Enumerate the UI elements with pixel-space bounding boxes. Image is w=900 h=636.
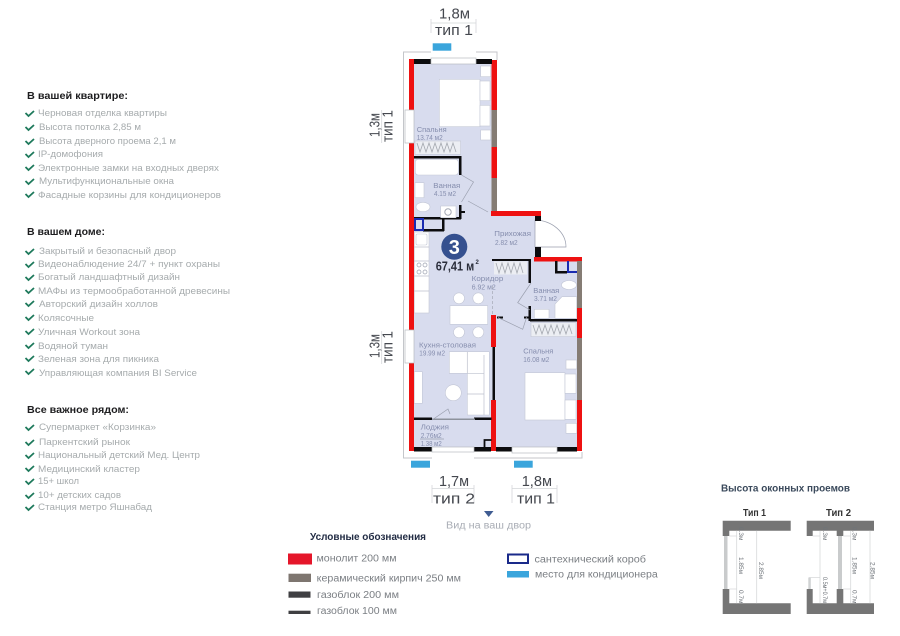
dimension: bottom window type 2 (432, 473, 475, 508)
room labels: Кухня-столовая (419, 340, 476, 350)
checklist: apartment features: IP-домофония (38, 149, 103, 160)
diagram: type 2: 1.85м (850, 557, 858, 575)
dimension: bottom window type 2: 1,7м (439, 473, 469, 490)
room labels: Ванная (533, 286, 559, 295)
apartment floor area (414, 64, 577, 447)
panel: nearby places list (26, 404, 200, 513)
diagram: type 1: 1.85м (737, 557, 744, 575)
diagram: type 1: 0.3м (737, 527, 744, 541)
legend: gas block 100: газоблок 100 мм (317, 605, 397, 617)
panel: legend (288, 531, 658, 617)
room labels: Спальня (523, 346, 553, 356)
legend heading: Условные обозначения (310, 531, 426, 543)
badge: three rooms: 3 (449, 237, 460, 259)
total area: 2 (476, 260, 480, 266)
legend: gas block 100 (288, 605, 397, 617)
furniture: dining table (450, 293, 488, 338)
diagram: type 1: Тип 1 (743, 507, 766, 519)
checklist: building features: Богатый ландшафтный дизайн (38, 272, 180, 283)
checklist: apartment features (26, 108, 221, 201)
diagram: type 1: 0.7м (737, 590, 744, 604)
checklist: nearby places: Медицинский кластер (38, 464, 140, 475)
diagram: type 1: 2.85м (757, 562, 764, 580)
windows (405, 58, 557, 453)
checklist: building features: Зеленая зона для пикника (38, 354, 160, 365)
checklist: apartment features: Фасадные корзины для кондиционеров (38, 190, 221, 201)
diagram: type 2: 0.7м (850, 590, 858, 604)
room labels: Ванная (433, 181, 460, 190)
checklist: apartment features: Электронные замки на входных дверях (38, 163, 219, 174)
legend: monolith: монолит 200 мм (316, 554, 397, 564)
checklist: building features (26, 246, 230, 379)
legend: plumbing shaft: сантехнический короб (534, 554, 646, 566)
furniture: bedroom 2 (492, 286, 577, 433)
checklist: building features: Уличная Workout зона (38, 327, 141, 338)
heading: everything nearby: Все важное рядом: (27, 404, 129, 416)
dimension: left lower window: 1,3м (366, 334, 384, 358)
dimension: bottom window type 1: 1,8м (522, 473, 552, 490)
checklist: building features: МАФы из термообработанной древесины (38, 286, 230, 297)
checklist: building features: Закрытый и безопасный двор (39, 246, 176, 257)
air conditioner spots (411, 43, 533, 468)
checklist: building features: Управляющая компания BI Service (39, 368, 197, 379)
diagram: type 2: 0.5м+0.7м (821, 577, 828, 603)
furniture: bathroom 1 fixtures (415, 159, 488, 218)
room labels: 3.71 м2 (534, 294, 557, 303)
total area: 67,41 м (436, 260, 474, 274)
entrance door (535, 220, 566, 247)
room labels: 4.15 м2 (434, 189, 456, 198)
diagram: type 2 (807, 507, 876, 614)
checklist: building features: Колясочные (38, 313, 94, 324)
room labels: Прихожая (494, 229, 531, 238)
room labels: Лоджия (421, 422, 449, 432)
checklist: building features: Авторский дизайн холлов (39, 299, 158, 310)
legend: air conditioner place: место для кондиционера (535, 570, 658, 580)
checklist: building features: Водяной туман (38, 341, 108, 352)
room labels: 2.76м2 (421, 431, 442, 440)
arrow: courtyard view (446, 511, 531, 532)
dimension: bottom window type 2: тип 2 (433, 490, 475, 508)
room labels: Спальня (417, 125, 447, 134)
monolith walls (409, 59, 582, 451)
heading: in your apartment: В вашей квартире: (27, 90, 128, 102)
room labels: 6.92 м2 (472, 282, 496, 292)
panel: window opening heights (721, 482, 876, 614)
dimension: top window: 1,8м (439, 6, 470, 22)
balcony outline (404, 52, 582, 458)
panel: building features list (26, 226, 230, 379)
room labels: 2.82 м2 (495, 238, 518, 247)
checklist: nearby places: Паркентский рынок (39, 437, 131, 448)
legend: gas block 200: газоблок 200 мм (317, 589, 399, 601)
checklist: apartment features: Высота потолка 2,85 м (39, 122, 141, 133)
diagram: type 2: 2.85м (868, 562, 876, 580)
checklist: nearby places: 15+ школ (38, 476, 79, 487)
room labels: 16.08 м2 (523, 355, 549, 364)
furniture: wardrobe 2 (531, 323, 576, 337)
dimension: left lower window: тип 1 (380, 331, 396, 363)
panel: apartment features list (26, 90, 221, 201)
furniture: bedroom 1 (439, 66, 491, 140)
diagram: type 1 (723, 507, 791, 614)
checklist: nearby places: Национальный детский Мед. Центр (38, 450, 200, 461)
checklist: apartment features: Мультифункциональные окна (39, 176, 175, 187)
checklist: apartment features: Черновая отделка квартиры (38, 108, 167, 119)
furniture: corridor hatch wardrobe (494, 262, 527, 274)
checklist: nearby places (26, 422, 200, 513)
furniture: kitchen units (414, 232, 429, 313)
diagram: type 2: Тип 2 (826, 507, 851, 519)
dimension: bottom window type 1 (512, 473, 557, 508)
diagram: type 2: 0.3м (850, 527, 858, 541)
room labels: Коридор (472, 274, 503, 283)
checklist: building features: Видеонаблюдение 24/7 + пункт охраны (38, 259, 220, 270)
window heights heading: Высота оконных проемов (721, 482, 851, 494)
checklist: nearby places: Супермаркет «Корзинка» (39, 422, 156, 433)
room labels: 1.38 м2 (421, 439, 442, 448)
plumbing shafts (415, 219, 577, 272)
room labels: 13.74 м2 (417, 133, 443, 142)
checklist: nearby places: Станция метро Яшнабад (38, 502, 152, 513)
floor plan (404, 43, 582, 468)
dimension: left upper window: тип 1 (380, 110, 396, 142)
checklist: apartment features: Высота дверного проема 2,1 м (39, 136, 176, 147)
arrow: courtyard view: Вид на ваш двор (446, 520, 531, 532)
gas block walls (414, 59, 577, 452)
furniture: loggia door (420, 409, 475, 439)
badge: three rooms (441, 234, 467, 260)
legend: ceramic brick: керамический кирпич 250 мм (317, 574, 461, 584)
room labels (417, 125, 559, 448)
dimension: left upper window: 1,3м (366, 113, 384, 137)
dimension: top window: тип 1 (435, 22, 473, 39)
dimension: top window (431, 6, 476, 39)
ceramic brick walls (492, 110, 582, 400)
legend: plumbing shaft (508, 554, 646, 566)
heading: in your building: В вашем доме: (27, 226, 105, 238)
room labels: 19.99 м2 (419, 348, 445, 358)
diagram: type 2: 0.3м (821, 527, 828, 541)
furniture: sofa (414, 352, 489, 415)
dimension: bottom window type 1: тип 1 (517, 490, 555, 508)
checklist: nearby places: 10+ детских садов (38, 490, 121, 501)
furniture: bathroom 2 fixtures (518, 280, 577, 318)
furniture: wardrobe 1 (415, 141, 461, 154)
legend: monolith (288, 554, 397, 564)
legend: gas block 200 (288, 589, 399, 601)
dimension: left lower window (366, 331, 396, 364)
dimension: left upper window (366, 110, 396, 143)
